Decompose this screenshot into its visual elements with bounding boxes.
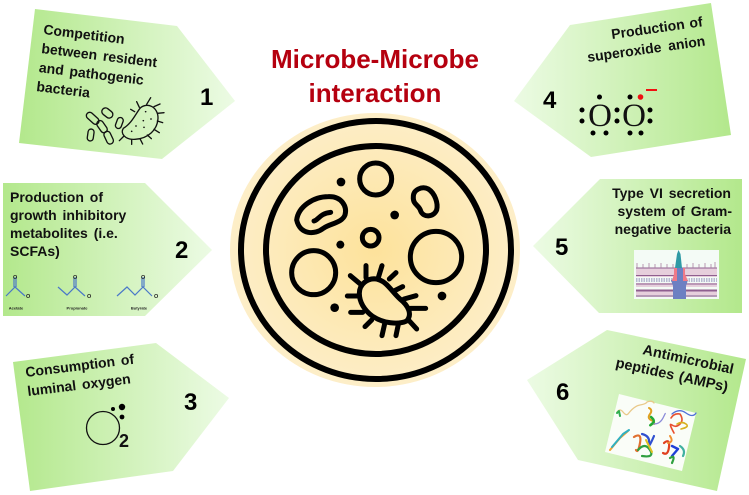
panel 4 heading: Production of [610, 13, 704, 42]
panel 1 heading: Competition [43, 21, 126, 47]
panel 5 heading [612, 185, 732, 237]
panel 5 heading: negative bacteria [615, 221, 731, 237]
panel 4 heading: superoxide anion [586, 33, 706, 65]
icon: superoxide Lewis structure: O [588, 98, 612, 134]
image: secretion system diagram [634, 250, 719, 299]
chemical structures: SCFAs: O [73, 275, 78, 281]
panel 3 heading [24, 351, 135, 399]
panel 3: luminal oxygen [13, 343, 229, 491]
panel 2 heading [10, 189, 127, 259]
panel 5 number: 5 [555, 234, 568, 261]
chemical structures: SCFAs [6, 275, 159, 310]
panel 1 heading: bacteria [36, 78, 91, 101]
chemical structures: SCFAs: Propionate [67, 306, 88, 310]
panel 6 number: 6 [556, 379, 569, 406]
panel 1 heading [36, 21, 158, 101]
panel 1 heading: between resident [41, 40, 158, 70]
chemical structures: SCFAs: O [154, 294, 159, 300]
panel 4 number: 4 [543, 87, 557, 114]
panel 5: type VI secretion [533, 179, 742, 313]
title [271, 44, 479, 108]
chemical structures: SCFAs: O [87, 294, 92, 300]
panel 3 heading: Consumption of [24, 351, 135, 380]
panel 6 heading: peptides (AMPs) [614, 355, 730, 396]
icon: oxygen molecule [86, 404, 129, 451]
icon: superoxide Lewis structure [580, 89, 657, 136]
panel 5 heading: Type VI secretion [612, 185, 731, 201]
panel 2 heading: SCFAs) [10, 243, 60, 259]
icon: oxygen molecule: 2 [119, 431, 129, 451]
panel 4 heading [586, 13, 706, 65]
panel 3 number: 3 [184, 389, 197, 416]
image: peptide structures [605, 394, 696, 471]
panel 6: antimicrobial peptides [527, 330, 746, 491]
panel 2 heading: metabolites (i.e. [10, 225, 118, 241]
panel 4: superoxide anion [514, 3, 731, 157]
panel 2 heading: Production of [10, 189, 103, 205]
chemical structures: SCFAs: O [26, 294, 31, 300]
title: Microbe-Microbe [271, 44, 479, 74]
chemical structures: SCFAs: Acetate [9, 306, 24, 310]
panel 3 heading: luminal oxygen [26, 370, 132, 399]
title: interaction [309, 78, 441, 108]
panel 5 heading: system of Gram- [618, 203, 732, 219]
chemical structures: SCFAs: O [141, 275, 146, 281]
chemical structures: SCFAs: O [13, 275, 18, 281]
panel 6 heading: Antimicrobial [641, 342, 735, 378]
panel 2: metabolites [3, 183, 212, 316]
panel 1: competition [19, 9, 235, 159]
icon: superoxide Lewis structure: O [622, 98, 646, 134]
panel 1 number: 1 [200, 84, 213, 111]
panel 2 heading: growth inhibitory [10, 207, 127, 223]
panel 2 number: 2 [175, 237, 188, 264]
chemical structures: SCFAs: Butyrate [131, 306, 148, 310]
icon: bacteria [85, 98, 164, 145]
central petri dish illustration [230, 113, 520, 387]
panel 1 heading: and pathogenic [38, 59, 145, 88]
